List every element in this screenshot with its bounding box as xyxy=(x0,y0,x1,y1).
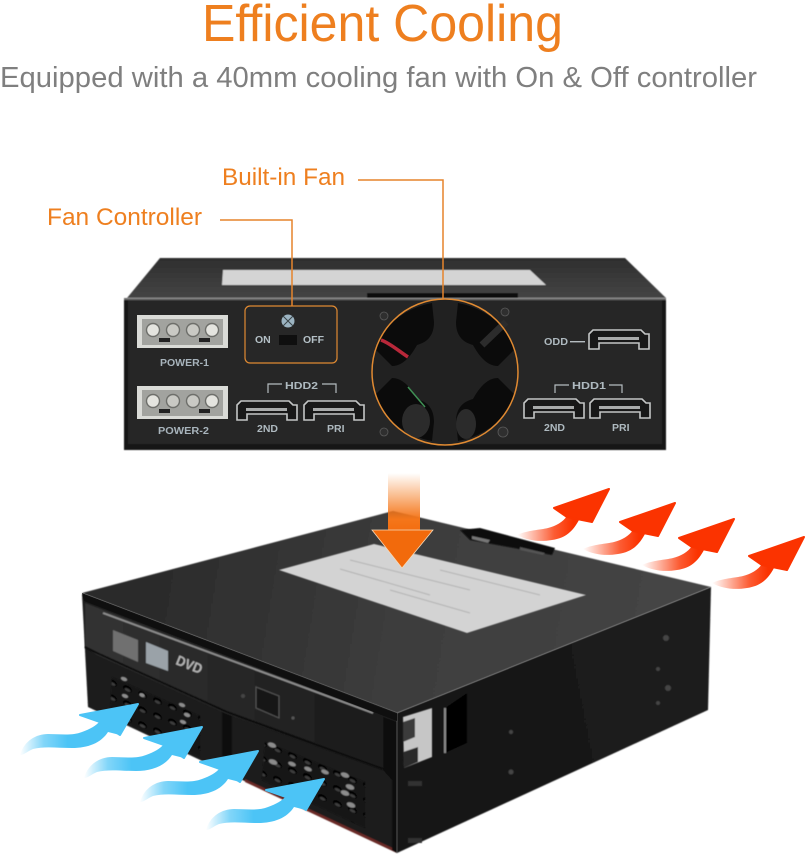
top face edge xyxy=(82,593,397,721)
HDD1 ports xyxy=(524,380,650,434)
arrows: hot air out xyxy=(517,489,804,589)
rear panel top face xyxy=(127,258,666,298)
rear panel face xyxy=(124,298,666,450)
top face xyxy=(82,511,711,713)
photo: enclosure in perspective xyxy=(82,511,711,853)
fan controller switch xyxy=(245,306,337,363)
leader line: Fan Controller xyxy=(220,220,292,306)
drive cage grill right xyxy=(262,741,365,828)
photo: rear panel of enclosure xyxy=(124,258,666,450)
panel screws xyxy=(380,308,509,437)
HDD1 ports: 2ND xyxy=(544,422,565,434)
HDD2 ports: 2ND xyxy=(257,423,278,435)
power connector 2 xyxy=(137,386,228,437)
leader line: Built-in Fan xyxy=(358,180,443,299)
arrows: cool air in xyxy=(20,704,324,830)
front bracket xyxy=(403,708,432,768)
drive cage grill left xyxy=(110,677,200,757)
optical drive bezel: DVD xyxy=(174,652,205,677)
power connector 1 xyxy=(137,315,228,369)
HDD1 ports: PRI xyxy=(612,422,630,434)
ODD port: ODD xyxy=(544,336,568,348)
HDD2 ports: PRI xyxy=(327,423,345,435)
subtitle: Equipped with a 40mm cooling fan with On & Off controller xyxy=(0,62,757,94)
HDD1 ports: HDD1 xyxy=(572,380,606,392)
fan controller switch: OFF xyxy=(303,334,325,346)
top slot xyxy=(460,528,555,555)
label: Built-in Fan: Built-in Fan xyxy=(222,164,345,191)
label: Fan Controller: Fan Controller xyxy=(47,204,202,231)
enclosure front xyxy=(82,594,397,853)
HDD2 ports xyxy=(237,380,364,435)
fan controller switch: ON xyxy=(255,334,271,346)
optical drive bezel xyxy=(85,603,383,770)
power connector 1: POWER-1 xyxy=(160,358,209,369)
power connector 2: POWER-2 xyxy=(158,426,209,437)
left grill highlights xyxy=(120,676,191,725)
top label sticker xyxy=(279,544,586,633)
enclosure right side xyxy=(397,587,711,853)
arrow: downward airflow xyxy=(372,473,433,568)
built-in fan xyxy=(372,299,518,445)
HDD2 ports: HDD2 xyxy=(285,380,318,392)
ODD port xyxy=(544,330,649,349)
